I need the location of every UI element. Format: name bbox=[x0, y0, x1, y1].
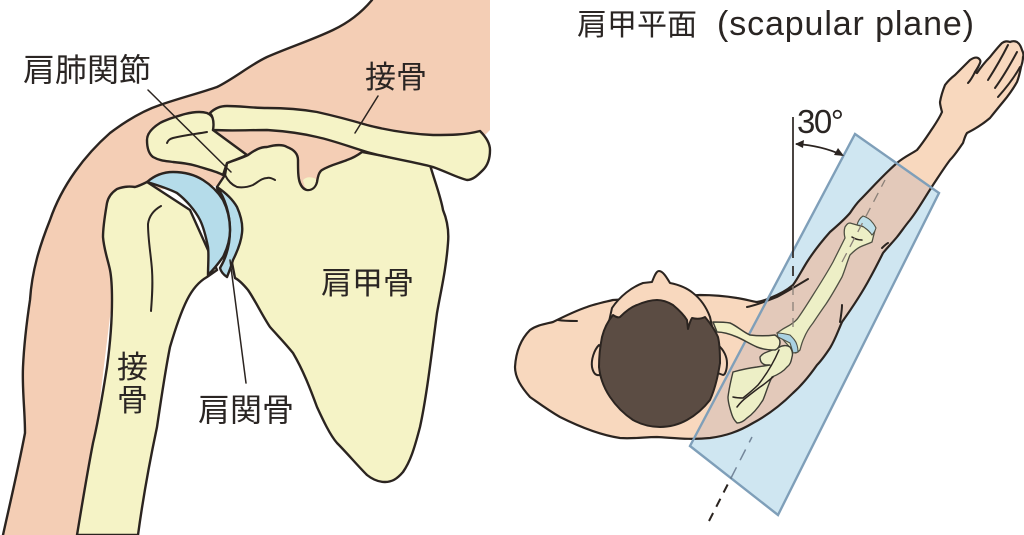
skin: shoulder bbox=[3, 0, 490, 535]
label: 肩甲骨: 肩甲骨 bbox=[321, 266, 414, 301]
cartilage: humeral head bbox=[147, 172, 230, 275]
head bbox=[592, 271, 727, 427]
label: 接骨 humerus: 骨 bbox=[117, 383, 148, 418]
arm seen through plane bbox=[696, 164, 930, 438]
bone: clavicle bbox=[210, 106, 490, 180]
panel: shoulder joint anatomy bbox=[3, 0, 490, 535]
label: 接骨 humerus: 接 bbox=[117, 350, 148, 385]
body outline bbox=[515, 41, 1023, 439]
bones in arm: humerus bbox=[777, 216, 876, 353]
label: 接骨 humerus bbox=[117, 350, 148, 418]
body creases bbox=[558, 45, 1020, 322]
cartilage: glenoid bbox=[217, 187, 242, 277]
title: 肩甲平面 bbox=[577, 9, 697, 42]
angle arrow bbox=[795, 140, 844, 156]
rectangle edge bbox=[690, 134, 939, 515]
body and arm bbox=[515, 41, 1023, 439]
bones in arm: scapula bbox=[728, 346, 792, 423]
axis: inclined dashed line bbox=[709, 180, 885, 521]
label: 接骨 clavicle bbox=[355, 60, 427, 133]
title bbox=[577, 5, 974, 43]
label: 肩肺関節: 肩肺関節 bbox=[23, 52, 151, 88]
label: 肩肺関節 bbox=[23, 52, 231, 172]
scapular plane rectangle bbox=[690, 134, 939, 515]
reference: vertical line bbox=[792, 117, 794, 330]
angle label: 30° bbox=[797, 103, 844, 140]
label: 接骨 clavicle: 接骨 bbox=[365, 60, 427, 95]
panel: scapular plane top view bbox=[515, 5, 1023, 521]
bones in arm: clavicle bbox=[713, 322, 780, 350]
title: (scapular plane) bbox=[717, 5, 974, 43]
bone: acromion and coracoid detail bbox=[147, 112, 316, 189]
label: 肩関骨 bbox=[198, 260, 294, 428]
label: 肩関骨: 肩関骨 bbox=[198, 392, 294, 428]
bone: scapula bbox=[217, 145, 448, 482]
bone: humerus bbox=[77, 182, 217, 535]
